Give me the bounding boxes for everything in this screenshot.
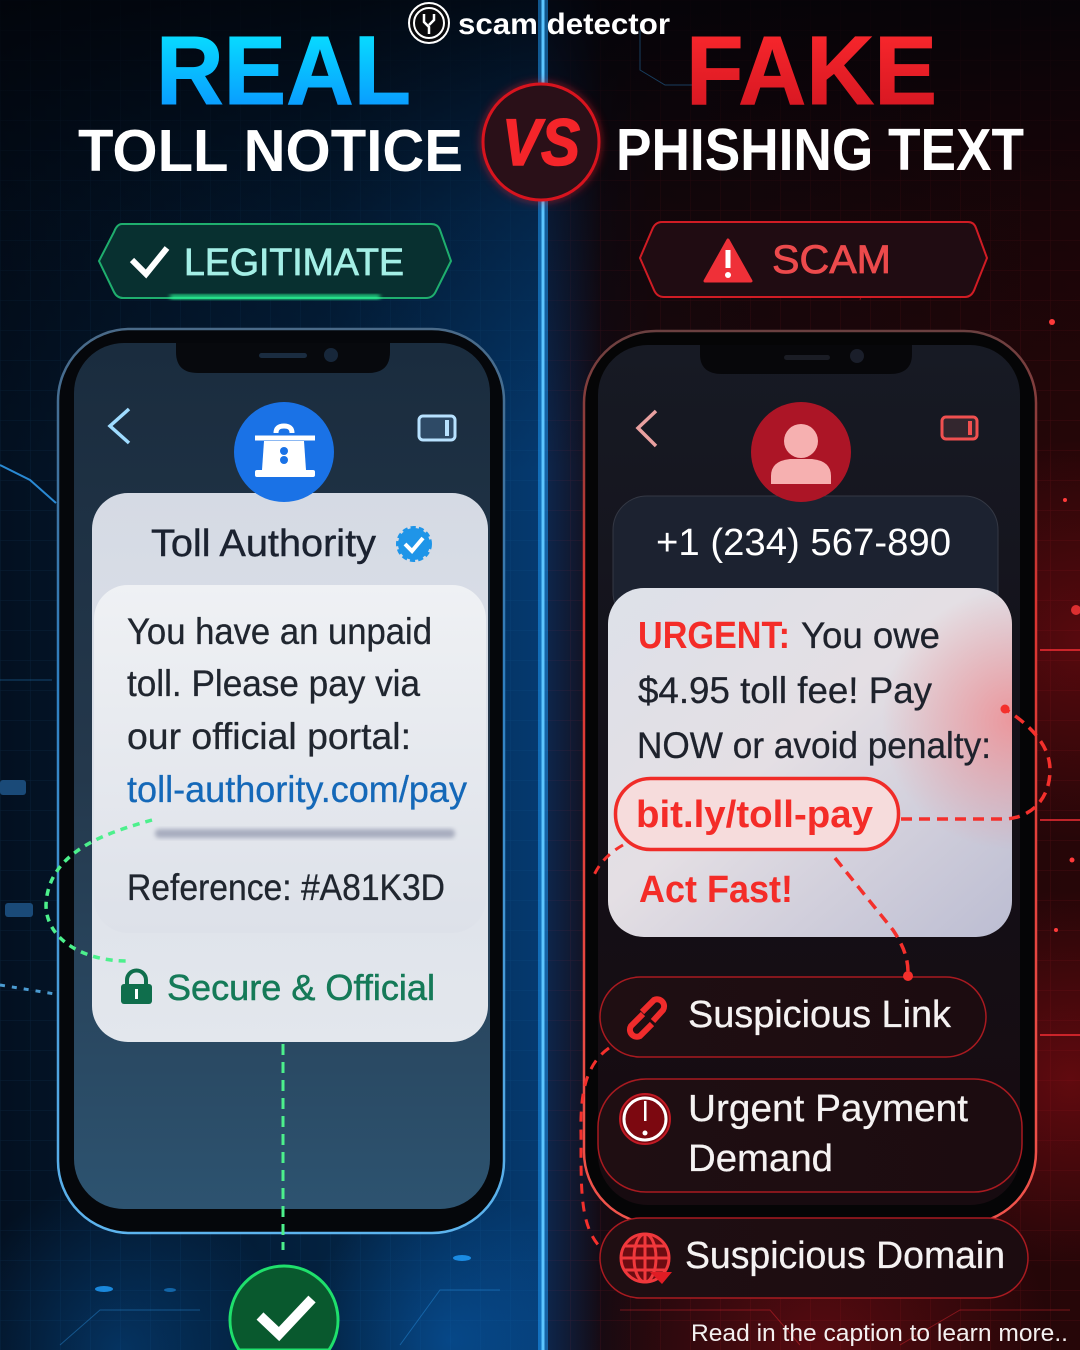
- arrow: green vertical connector: [282, 1044, 284, 1250]
- icon: blue toll circle: [234, 402, 334, 502]
- sender card: [613, 496, 998, 626]
- arrow: left dashed curve to pills: [581, 1048, 609, 1247]
- message text: [127, 611, 432, 757]
- icon: back chevron: [110, 409, 129, 443]
- badge: scam: [640, 222, 987, 297]
- icon: check mark: [132, 248, 167, 274]
- icon: lock: [121, 970, 152, 1004]
- badge label: LEGITIMATE: [184, 242, 404, 284]
- pill: suspicious domain: [600, 1218, 1028, 1298]
- arrow: link to outer curve: [901, 704, 1050, 819]
- reference text: Reference: #A81K3D: [127, 867, 445, 908]
- sender name: Toll Authority: [151, 523, 376, 565]
- panel: fake phone: [584, 331, 1036, 1298]
- link pill: bit.ly/toll-pay: [636, 794, 873, 836]
- heading: fake: FAKE: [686, 16, 937, 125]
- arrow: link to left side: [592, 845, 623, 880]
- icon: red contact circle: [751, 402, 851, 502]
- phone body: [58, 329, 504, 1233]
- icon: globe: [621, 1234, 672, 1284]
- message body: [94, 585, 486, 933]
- heading: real: REAL: [156, 16, 411, 125]
- icon: verified badge: [398, 528, 430, 560]
- title: fake phishing text: [616, 16, 1024, 183]
- act fast: Act Fast!: [639, 869, 793, 911]
- arrow: link to suspicious link pill: [835, 858, 913, 981]
- urgent label: URGENT:: [638, 615, 790, 657]
- icon: clock alert: [620, 1094, 670, 1144]
- message text: You have an unpaid: [127, 611, 432, 652]
- message text: NOW or avoid penalty:: [637, 725, 991, 766]
- vs badge: VS: [502, 105, 580, 179]
- icon: broken chain: [630, 999, 664, 1037]
- icon: back chevron: [638, 411, 656, 446]
- message text: our official portal:: [127, 716, 411, 757]
- message text: $4.95 toll fee! Pay: [638, 670, 932, 711]
- badge label: SCAM: [772, 238, 891, 282]
- pill: urgent payment demand: [598, 1079, 1022, 1192]
- icon: battery: [419, 416, 455, 440]
- pill: urgent payment demand: Urgent Payment: [688, 1088, 968, 1130]
- pill: suspicious link: [600, 977, 986, 1057]
- message text: You owe: [801, 615, 940, 656]
- message text: toll. Please pay via: [127, 663, 420, 704]
- link pill: [616, 778, 898, 850]
- arrow: green curve: [46, 820, 152, 961]
- title: real toll notice: [78, 16, 463, 184]
- panel: real phone: [58, 329, 504, 1233]
- badge: legitimate: [99, 224, 451, 299]
- logo: [409, 3, 670, 43]
- pill: suspicious link: Suspicious Link: [688, 994, 952, 1036]
- message card: [608, 588, 1012, 937]
- divider line: [538, 0, 548, 1350]
- icon: logo mark: [409, 3, 449, 43]
- icon: warning triangle: [705, 240, 751, 281]
- icon: battery: [942, 417, 977, 439]
- pill: suspicious domain: Suspicious Domain: [685, 1235, 1005, 1277]
- message text: [637, 615, 991, 766]
- heading: toll notice: TOLL NOTICE: [78, 118, 463, 184]
- icon: green check circle: [230, 1266, 338, 1350]
- logo wordmark: scam detector: [458, 8, 670, 41]
- message card: [92, 493, 488, 1042]
- sender number: +1 (234) 567-890: [656, 522, 951, 564]
- caption: Read in the caption to learn more..: [691, 1320, 1068, 1347]
- phone body: [584, 331, 1036, 1224]
- secure label: Secure & Official: [167, 967, 435, 1008]
- pill: urgent payment demand: Demand: [688, 1138, 833, 1180]
- vs badge: [482, 83, 600, 201]
- heading: phishing text: PHISHING TEXT: [616, 117, 1024, 183]
- link: toll-authority.com/pay: [127, 769, 467, 810]
